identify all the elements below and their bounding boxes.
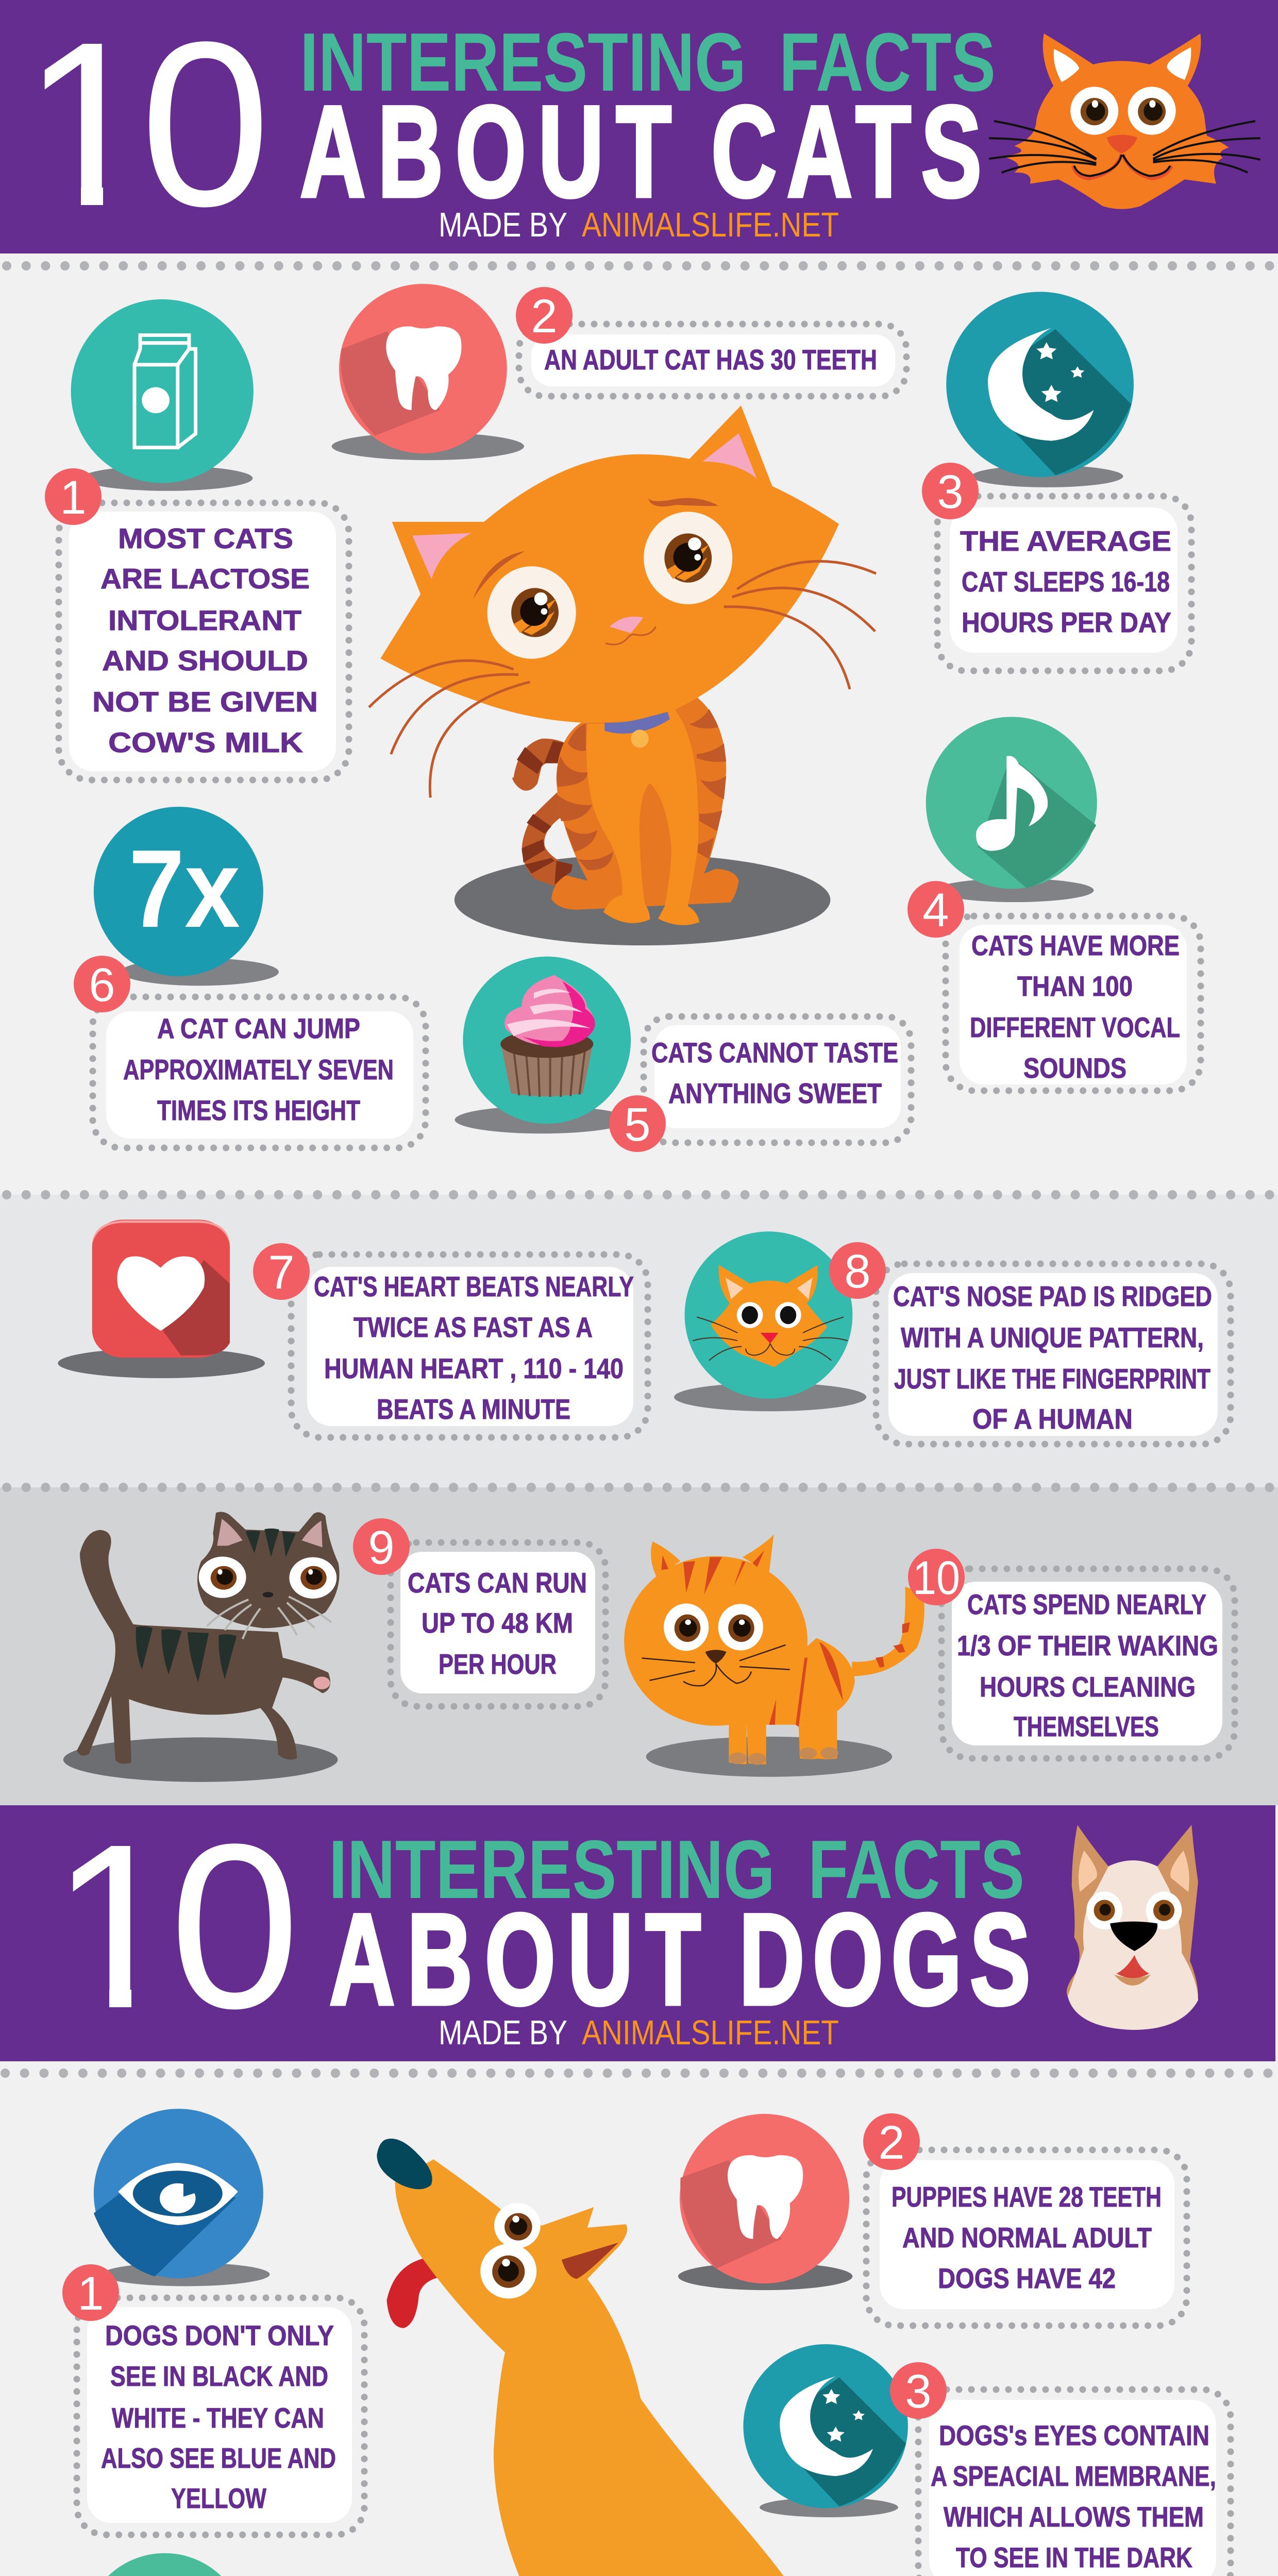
title: about cats: CATS bbox=[711, 79, 982, 224]
card: dog fact 1: DOGS DON'T ONLY bbox=[105, 2319, 334, 2351]
icon: moon and stars bbox=[743, 2344, 908, 2517]
card: cat fact 8: OF A HUMAN bbox=[972, 1403, 1133, 1435]
card: cat fact 1: MOST CATS bbox=[118, 522, 293, 554]
card: dog fact 2 bbox=[863, 2113, 1187, 2326]
card: cat fact 8: WITH A UNIQUE PATTERN, bbox=[901, 1321, 1204, 1353]
card: dog fact 3: A SPEACIAL MEMBRANE, bbox=[931, 2460, 1216, 2492]
card: cat fact 3: 3 bbox=[937, 466, 964, 518]
card: dog fact 3: 3 bbox=[905, 2365, 932, 2418]
credit line bbox=[439, 206, 839, 244]
card: cat fact 2: 2 bbox=[531, 290, 558, 343]
card: dog fact 1: YELLOW bbox=[171, 2482, 266, 2514]
card: cat fact 4: 4 bbox=[922, 884, 949, 937]
credit line bbox=[439, 2013, 839, 2052]
card: cat fact 5: 5 bbox=[624, 1098, 651, 1151]
card: cat fact 4: THAN 100 bbox=[1017, 970, 1133, 1002]
card: dog fact 2: PUPPIES HAVE 28 TEETH bbox=[892, 2181, 1162, 2213]
card: dog fact 2: DOGS HAVE 42 bbox=[938, 2262, 1116, 2294]
card: cat fact 10 bbox=[908, 1549, 1235, 1758]
icon: header cat face bbox=[989, 33, 1260, 209]
credit line: ANIMALSLIFE.NET bbox=[582, 2013, 839, 2052]
card: cat fact 10: 10 bbox=[913, 1552, 960, 1604]
title: about dogs: ABOUT bbox=[329, 1887, 701, 2032]
card: cat fact 6: 6 bbox=[89, 959, 115, 1011]
card: cat fact 9: 9 bbox=[368, 1521, 395, 1574]
card: cat fact 3: THE AVERAGE bbox=[960, 525, 1171, 557]
cats header banner bbox=[0, 0, 1278, 255]
card: dog fact 1: WHITE - THEY CAN bbox=[112, 2402, 324, 2434]
card: dog fact 3: TO SEE IN THE DARK bbox=[956, 2541, 1192, 2573]
title: number 10: 10 bbox=[22, 0, 271, 255]
card: cat fact 4: DIFFERENT VOCAL bbox=[970, 1011, 1180, 1043]
card: dog fact 2: AND NORMAL ADULT bbox=[902, 2222, 1152, 2253]
title: about cats bbox=[300, 79, 982, 224]
card: cat fact 2 bbox=[516, 287, 906, 396]
title: about dogs bbox=[329, 1887, 1031, 2032]
credit line: ANIMALSLIFE.NET bbox=[582, 206, 839, 244]
card: dog fact 1 bbox=[62, 2264, 364, 2535]
illustration: brown tabby cat bbox=[63, 1512, 340, 1782]
card: cat fact 8 bbox=[829, 1242, 1231, 1444]
icon: header dog face bbox=[1067, 1825, 1198, 2030]
card: cat fact 6 bbox=[74, 956, 426, 1148]
title: interesting facts: INTERESTING bbox=[300, 16, 746, 109]
icon: 7x jump: 7x bbox=[129, 826, 240, 951]
card: dog fact 3: WHICH ALLOWS THEM bbox=[944, 2501, 1204, 2533]
title: interesting facts: FACTS bbox=[808, 1823, 1024, 1916]
card: cat fact 6: APPROXIMATELY SEVEN bbox=[123, 1054, 394, 1086]
dogs header banner bbox=[0, 1795, 1275, 2061]
card: cat fact 7 bbox=[253, 1243, 648, 1437]
card: cat fact 9: CATS CAN RUN bbox=[408, 1567, 587, 1599]
card: cat fact 10: HOURS CLEANING bbox=[980, 1671, 1196, 1703]
illustration: round orange cat bbox=[624, 1534, 924, 1777]
card: cat fact 1: COW'S MILK bbox=[108, 726, 303, 758]
card: cat fact 1: ARE LACTOSE bbox=[100, 563, 310, 595]
icon: milk carton bbox=[71, 299, 254, 491]
card: cat fact 1: 1 bbox=[60, 471, 87, 524]
card: cat fact 9 bbox=[353, 1518, 606, 1706]
title: number 10: 10 bbox=[51, 1795, 300, 2057]
card: cat fact 5: ANYTHING SWEET bbox=[668, 1077, 882, 1109]
title: interesting facts: INTERESTING bbox=[329, 1823, 775, 1916]
card: cat fact 10: 1/3 OF THEIR WAKING bbox=[957, 1630, 1218, 1662]
card: cat fact 2: AN ADULT CAT HAS 30 TEETH bbox=[544, 344, 877, 376]
card: dog fact 2: 2 bbox=[878, 2116, 905, 2169]
card: dog fact 3 bbox=[890, 2362, 1231, 2576]
title: about dogs: DOGS bbox=[739, 1887, 1031, 2032]
icon: music note bbox=[926, 717, 1097, 902]
icon: eye bbox=[94, 2109, 270, 2286]
card: cat fact 3: HOURS PER DAY bbox=[962, 606, 1171, 638]
card: cat fact 5 bbox=[609, 1016, 911, 1152]
card: cat fact 7: CAT'S HEART BEATS NEARLY bbox=[314, 1270, 634, 1302]
card: cat fact 3: CAT SLEEPS 16-18 bbox=[962, 566, 1170, 598]
card: cat fact 4: SOUNDS bbox=[1023, 1052, 1126, 1084]
icon: tooth bbox=[678, 2114, 852, 2290]
card: cat fact 3 bbox=[922, 463, 1191, 671]
icon: orange cat face badge bbox=[674, 1231, 866, 1411]
card: cat fact 1: AND SHOULD bbox=[102, 645, 308, 676]
card: dog fact 1: ALSO SEE BLUE AND bbox=[101, 2442, 336, 2474]
illustration: big orange dog bbox=[363, 2139, 1082, 2576]
icon: heart tile bbox=[58, 1219, 265, 1378]
card: dog fact 3: DOGS's EYES CONTAIN bbox=[939, 2419, 1209, 2451]
card: cat fact 6: TIMES ITS HEIGHT bbox=[157, 1094, 360, 1126]
icon: 7x jump bbox=[94, 807, 279, 986]
card: dog fact 1: 1 bbox=[77, 2267, 104, 2320]
card: cat fact 1 bbox=[45, 468, 349, 780]
title: interesting facts: FACTS bbox=[779, 16, 996, 109]
card: cat fact 5: CATS CANNOT TASTE bbox=[651, 1037, 898, 1069]
card: cat fact 9: UP TO 48 KM bbox=[422, 1607, 573, 1639]
card: cat fact 6: A CAT CAN JUMP bbox=[157, 1012, 360, 1044]
card: cat fact 1: NOT BE GIVEN bbox=[92, 686, 318, 718]
card: cat fact 10: THEMSELVES bbox=[1014, 1710, 1159, 1742]
card: cat fact 4: CATS HAVE MORE bbox=[971, 929, 1180, 961]
card: cat fact 7: HUMAN HEART , 110 - 140 bbox=[324, 1352, 624, 1384]
card: cat fact 7: 7 bbox=[268, 1246, 295, 1299]
icon: moon and stars bbox=[946, 292, 1134, 487]
credit line: MADE BY bbox=[439, 206, 567, 244]
card: cat fact 1: INTOLERANT bbox=[108, 604, 301, 636]
credit line: MADE BY bbox=[439, 2013, 567, 2052]
icon: 4x hearing bbox=[83, 2553, 262, 2576]
card: cat fact 9: PER HOUR bbox=[439, 1648, 557, 1680]
card: cat fact 7: BEATS A MINUTE bbox=[377, 1393, 570, 1425]
card: cat fact 8: 8 bbox=[844, 1245, 871, 1298]
card: cat fact 10: CATS SPEND NEARLY bbox=[967, 1588, 1206, 1620]
card: cat fact 4 bbox=[907, 881, 1201, 1091]
title: about cats: ABOUT bbox=[300, 79, 671, 224]
card: cat fact 8: CAT'S NOSE PAD IS RIDGED bbox=[893, 1280, 1212, 1312]
card: cat fact 7: TWICE AS FAST AS A bbox=[354, 1311, 593, 1343]
illustration: big orange cat bbox=[369, 405, 876, 945]
icon: cupcake bbox=[455, 957, 631, 1133]
icon: tooth bbox=[332, 284, 524, 460]
card: dog fact 1: SEE IN BLACK AND bbox=[110, 2360, 328, 2392]
